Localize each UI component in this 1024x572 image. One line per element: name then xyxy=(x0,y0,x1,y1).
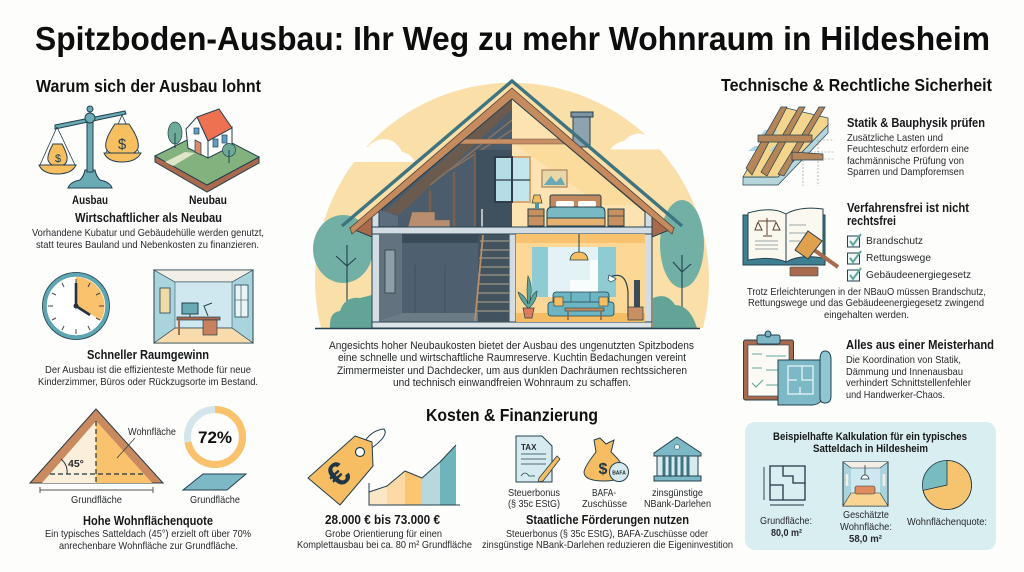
window and curtains xyxy=(532,247,616,297)
collar beam xyxy=(456,139,568,144)
text block: Wirtschaftlicher als Neubau: statt teures Bauland und Nebenkosten zu finanzieren. xyxy=(36,240,259,251)
title: Spitzboden-Ausbau: Ihr Weg zu mehr Wohnraum in Hildesheim xyxy=(35,20,990,57)
floor lamp xyxy=(608,275,628,317)
text block: Staatliche Förderungen nutzen xyxy=(482,513,733,551)
ground line xyxy=(315,328,700,330)
diagram: roof cross-section 45 degrees xyxy=(30,409,176,506)
stairs xyxy=(475,235,509,322)
label: Geschätzte Wohnfläche 58,0 m²: Wohnfläche: xyxy=(840,522,892,533)
bed xyxy=(547,195,605,226)
text block: price range: 28.000 € bis 73.000 € xyxy=(325,513,440,527)
text block: Hohe Wohnflächenquote: anrechenbare Wohnfläche zur Grundfläche. xyxy=(59,541,238,552)
text block: Statik & Bauphysik prüfen: Feuchteschutz erfordern eine xyxy=(847,144,969,155)
intro text block xyxy=(329,340,695,389)
ground floor right living room xyxy=(516,234,645,322)
text block: Staatliche Förderungen nutzen: zinsgünstige NBank-Darlehen reduzieren die Eigeninvestition xyxy=(482,540,733,551)
label: Neubau: Neubau xyxy=(189,195,227,207)
label: Grundfläche: Grundfläche xyxy=(190,495,240,506)
text block: Schneller Raumgewinn: Der Ausbau ist die effizienteste Methode für neue xyxy=(45,365,251,376)
panel: Warum sich der Ausbau lohnt xyxy=(30,76,264,552)
text block: Statik & Bauphysik prüfen xyxy=(847,116,985,178)
icon: floor plate xyxy=(183,474,246,490)
icon: euro price tag: € xyxy=(319,454,358,495)
chimney xyxy=(571,112,593,147)
icon: BAFA money bag xyxy=(584,438,628,482)
label: Wohnflächenquote: Wohnflächenquote: xyxy=(907,517,987,528)
label: Geschätzte Wohnfläche 58,0 m²: Geschätzte xyxy=(843,510,889,521)
icon: tax document: TAX xyxy=(521,443,537,452)
panel title xyxy=(773,431,967,455)
label: Geschätzte Wohnfläche 58,0 m²: 58,0 m² xyxy=(849,534,883,545)
diagram: roof cross-section 45 degrees: Grundfläche xyxy=(71,495,122,506)
label: Steuerbonus: (§ 35c EStG) xyxy=(508,499,560,510)
label: BAFA-Zuschüsse: Zuschüsse xyxy=(582,499,627,510)
icon: law book with gavel xyxy=(743,208,838,276)
text block: Statik & Bauphysik prüfen: Statik & Bauphysik prüfen xyxy=(847,116,985,130)
text block: Alles aus einer Meisterhand: verhindert Schnittstellenfehler xyxy=(846,378,971,389)
label: zinsgünstige NBank-Darlehen: zinsgünstige xyxy=(652,488,703,499)
check item: Brandschutz: Brandschutz xyxy=(866,236,923,247)
text block: Statik & Bauphysik prüfen: fachmännische Prüfung von xyxy=(847,156,964,167)
text block: Statik & Bauphysik prüfen: Zusätzliche Lasten und xyxy=(847,133,943,144)
icon: clock xyxy=(42,272,110,340)
icon: balance scale with money bags: $ xyxy=(118,136,127,153)
picture xyxy=(542,170,567,187)
icon: BAFA money bag: $ xyxy=(599,461,608,478)
attic right finished xyxy=(495,98,645,227)
icon: BAFA money bag: BAFA xyxy=(612,470,626,476)
text block: Alles aus einer Meisterhand: Die Koordination von Statik, xyxy=(846,355,961,366)
text block: Hohe Wohnflächenquote: Hohe Wohnflächenquote xyxy=(83,514,213,528)
panel: Kosten und Finanzierung xyxy=(297,405,733,551)
icon: euro price tag xyxy=(308,429,385,505)
text block: Wirtschaftlicher als Neubau: Wirtschaftlicher als Neubau xyxy=(75,211,222,225)
icon: house on plot xyxy=(155,109,259,192)
trees xyxy=(313,200,704,328)
icon: clipboard and blueprint xyxy=(744,331,831,405)
central illustration: house cross-section xyxy=(313,81,709,328)
icon: converted room xyxy=(154,270,253,343)
sun backdrop xyxy=(315,83,709,328)
text block: price range: Grobe Orientierung für einen xyxy=(325,529,442,540)
text block: Verfahrensfrei ist nicht rechtsfrei: Verfahrensfrei ist nicht xyxy=(847,201,970,215)
icon: living room xyxy=(843,462,888,506)
text block: Statik & Bauphysik prüfen: Sparren und Dampforemsen xyxy=(847,167,964,178)
text block: Verfahrensfrei ist nicht rechtsfrei xyxy=(847,201,970,228)
label: zinsgünstige NBank-Darlehen xyxy=(644,488,711,510)
chart: 72 percent donut xyxy=(188,410,243,464)
intro text block: Angesichts hoher Neubaukosten bietet der Ausbau des ungenutzten Spitzbodens xyxy=(329,340,695,352)
pendant lamp xyxy=(570,234,588,260)
heading: Warum sich der Ausbau lohnt: Warum sich der Ausbau lohnt xyxy=(36,76,261,96)
icon: rafters construction xyxy=(743,107,834,186)
panel: Beispielhafte Kalkulation xyxy=(745,422,996,550)
icon: balance scale with money bags: $ xyxy=(55,153,61,165)
text block: Alles aus einer Meisterhand: Alles aus einer Meisterhand xyxy=(846,338,994,352)
heading: Kosten & Finanzierung: Kosten & Finanzierung xyxy=(426,405,598,425)
text block: Trotz Erleichterungen xyxy=(747,287,986,321)
text block: Trotz Erleichterungen: Rettungswege und das Gebäudeenergiegesetz zwingend xyxy=(748,298,984,309)
chart: pie 72 percent xyxy=(922,460,972,510)
chart: 72 percent donut: 72% xyxy=(198,428,232,447)
label: zinsgünstige NBank-Darlehen: NBank-Darlehen xyxy=(644,499,711,510)
window xyxy=(495,157,530,202)
text block: Schneller Raumgewinn: Kinderzimmer, Büros oder Rückzugsorte im Bestand. xyxy=(38,377,258,388)
icon: tax document xyxy=(516,436,560,482)
intro text block: Zimmermeister und Dachdecker, um aus dunklen Dachräumen rechtssicheren xyxy=(337,365,687,377)
panel title: Beispielhafte Kalkulation für ein typisches xyxy=(773,431,967,443)
chart: rising cost area xyxy=(369,445,460,505)
label: Grundfläche 80,0 m²: 80,0 m² xyxy=(771,528,803,539)
intro text block: eine schnelle und wirtschaftliche Raumreserve. Kuchtin Bedachungen vereint xyxy=(338,352,686,364)
text block: Staatliche Förderungen nutzen: Staatliche Förderungen nutzen xyxy=(526,513,689,527)
label: Geschätzte Wohnfläche 58,0 m² xyxy=(840,510,892,545)
label: Steuerbonus xyxy=(508,488,560,510)
sofa xyxy=(548,292,614,316)
ground floor left unfinished xyxy=(379,234,509,322)
diagram: roof cross-section 45 degrees: Wohnfläche xyxy=(128,427,176,438)
lamp and nightstands xyxy=(528,195,624,226)
icon: floor plan xyxy=(764,466,805,505)
text block: Alles aus einer Meisterhand xyxy=(846,338,994,401)
panel title: Satteldach in Hildesheim xyxy=(813,443,928,455)
label: BAFA-Zuschüsse: BAFA- xyxy=(592,488,616,499)
label: Ausbau: Ausbau xyxy=(72,195,108,207)
coffee table xyxy=(565,308,604,320)
text block: Alles aus einer Meisterhand: Dämmung und Innenausbau xyxy=(846,367,963,378)
label: Steuerbonus: Steuerbonus xyxy=(508,488,560,499)
text block: Alles aus einer Meisterhand: und Handwerker-Chaos. xyxy=(846,390,945,401)
text block: Trotz Erleichterungen: Trotz Erleichterungen in der NBauO müssen Brandschutz, xyxy=(747,287,986,298)
text block: Wirtschaftlicher als Neubau: Vorhandene Kubatur und Gebäudehülle werden genutzt, xyxy=(32,228,264,239)
heading: Technische & Rechtliche Sicherheit: Technische & Rechtliche Sicherheit xyxy=(721,75,992,95)
check item: Rettungswege: Rettungswege xyxy=(866,253,931,264)
icon: bank building xyxy=(654,437,701,481)
intro text block: und technisch einwandfreien Wohnraum zu schaffen. xyxy=(393,377,631,389)
walls and floors xyxy=(372,207,652,328)
diagram: roof cross-section 45 degrees: 45° xyxy=(68,458,84,470)
text block: Schneller Raumgewinn xyxy=(38,348,258,388)
text block: Schneller Raumgewinn: Schneller Raumgewinn xyxy=(87,348,209,362)
label: BAFA-Zuschüsse xyxy=(582,488,627,510)
checklist xyxy=(848,234,971,281)
label: Grundfläche 80,0 m² xyxy=(760,516,812,539)
plant xyxy=(518,276,537,318)
box and speaker xyxy=(628,280,643,320)
label: Grundfläche 80,0 m²: Grundfläche: xyxy=(760,516,812,527)
check item: Gebäudeenergiegesetz: Gebäudeenergiegesetz xyxy=(866,270,971,281)
attic left unfinished xyxy=(379,98,512,227)
text block: Staatliche Förderungen nutzen: Steuerbonus (§ 35c EStG), BAFA-Zuschüsse oder xyxy=(506,529,708,540)
text block: Trotz Erleichterungen: eingehalten werden. xyxy=(824,310,909,321)
panel: Technische und Rechtliche Sicherheit xyxy=(721,75,996,550)
text block: Verfahrensfrei ist nicht rechtsfrei: rechtsfrei xyxy=(847,214,896,228)
text block: Hohe Wohnflächenquote: Ein typisches Satteldach (45°) erzielt oft über 70% xyxy=(45,529,251,540)
text block: Hohe Wohnflächenquote xyxy=(45,514,251,552)
text block: price range: Komplettausbau bei ca. 80 m² Grundfläche xyxy=(297,540,472,551)
roof xyxy=(342,81,682,237)
text block: Wirtschaftlicher als Neubau xyxy=(32,211,264,251)
icon: balance scale with money bags xyxy=(39,106,141,188)
text block: price range xyxy=(297,513,472,551)
